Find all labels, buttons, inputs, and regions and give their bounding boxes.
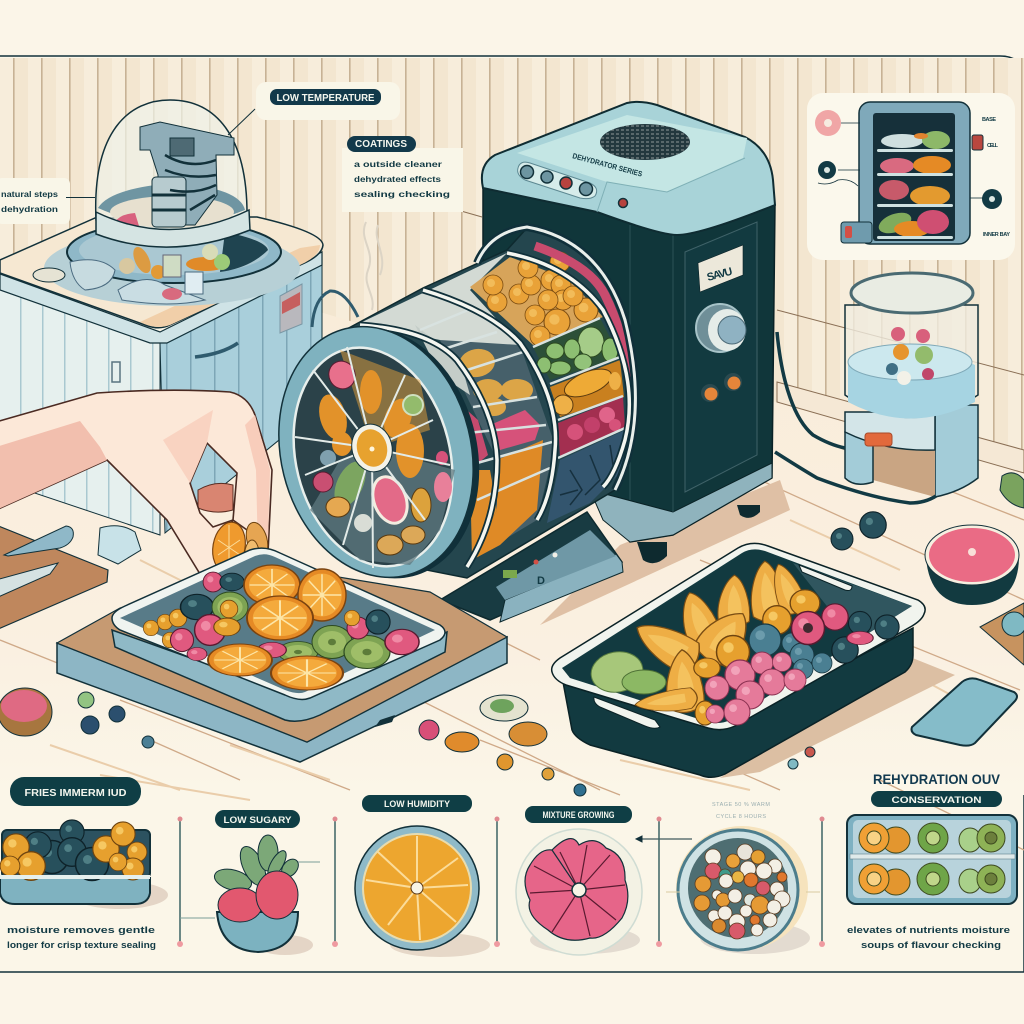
pan handles (799, 565, 852, 590)
rails (420, 308, 625, 500)
inset panel: stacked tray cross-section: CELL (987, 143, 999, 149)
door pull (112, 362, 120, 382)
callout: low temperature: LOW TEMPERATURE (276, 93, 375, 104)
counter left face (0, 280, 160, 535)
step 6 caption (847, 925, 1010, 950)
compartment fruit (859, 823, 1005, 895)
small faint caption: CYCLE 8 HOURS (716, 814, 766, 820)
green section (533, 318, 620, 380)
rehydration pill (871, 791, 1002, 807)
main dehydrator machine (482, 102, 775, 563)
small faint caption: STAGE 50 % WARM (712, 802, 770, 808)
glass trinkets on counter (33, 260, 205, 304)
lid seam (597, 158, 745, 212)
step 1 heading pill (10, 777, 141, 806)
step 2 berry bowl icon (212, 835, 320, 955)
jar lid (851, 273, 973, 313)
grapefruit half (925, 525, 1019, 605)
divider post (179, 818, 181, 944)
counter wooden top (0, 217, 323, 328)
right leg (935, 405, 978, 497)
orange buttons (701, 384, 719, 402)
step 1 caption: moisture removes gentle (7, 925, 155, 935)
control knob (696, 304, 744, 352)
gap floor (873, 442, 935, 497)
cutting board with knife (0, 525, 141, 630)
callout: coatings: dehydrated effects (354, 174, 441, 184)
cabinet outline (859, 102, 970, 244)
counter trim band (0, 252, 322, 343)
drawer knob (841, 222, 872, 243)
main dehydrator machine: SAVU (706, 266, 734, 284)
small faint caption (712, 802, 770, 820)
red tag (972, 135, 983, 150)
small glass jar far left (0, 310, 22, 412)
food in basin (119, 244, 230, 279)
glass jar (845, 305, 978, 418)
tray rim (112, 548, 445, 699)
right face inset (685, 222, 757, 492)
step 3 heading pill (362, 795, 472, 812)
base red switch (865, 433, 892, 446)
wheel spokes (295, 347, 450, 568)
shadow under machine (540, 480, 790, 625)
step 6 caption: soups of flavour checking (861, 940, 1001, 950)
water jar appliance (845, 273, 978, 497)
mango section (550, 360, 624, 417)
raspberry section (558, 397, 625, 457)
phone on table (912, 678, 1017, 746)
power cord (775, 332, 936, 503)
appliance ring basin (44, 230, 300, 306)
step 1 caption: longer for crisp texture sealing (7, 940, 156, 950)
left fruit tray (112, 548, 447, 721)
callout: coatings: sealing checking (354, 189, 450, 199)
counter handle (195, 343, 238, 357)
pan fruit (588, 559, 899, 725)
pink object behind hand gap (198, 483, 233, 512)
callout: low temperature (228, 82, 400, 135)
wooden floor (0, 205, 1024, 850)
shelf 2 (877, 156, 953, 176)
callout: coatings: a outside cleaner (354, 159, 443, 169)
pan outer body (563, 628, 913, 777)
step 4 heading pill (525, 806, 632, 823)
drum base unit (440, 512, 623, 622)
lid buttons (520, 166, 628, 208)
shadow under pan (720, 655, 955, 778)
lid button strip (518, 162, 597, 199)
step 3 dried orange slice (355, 826, 490, 957)
pan rim (552, 543, 925, 730)
background wall with vertical slats (0, 58, 1024, 480)
dark blue berry section (547, 430, 625, 523)
pink strip behind rear ring (535, 246, 634, 420)
rehydration pill: CONSERVATION (892, 795, 982, 805)
divider post (334, 818, 336, 944)
left leg (845, 432, 873, 484)
collar (845, 412, 935, 450)
step 4 heading pill: MIXTURE GROWING (542, 810, 614, 820)
callout: coatings (342, 136, 463, 212)
rehydration heading: REHYDRATION OUV (873, 771, 1001, 787)
step 6 compartment tray (847, 815, 1017, 904)
wooden board and blue base under left tray (57, 565, 507, 762)
callout: left label: natural steps (1, 189, 58, 199)
drum base unit: D (537, 575, 545, 587)
drum shell (345, 228, 635, 578)
shelf 3 (877, 180, 953, 207)
fruit in jar (886, 327, 934, 385)
dark marker left (818, 161, 836, 179)
jar water (848, 350, 975, 418)
divider post (821, 818, 823, 944)
tray wall (112, 630, 447, 721)
held dried slices (209, 520, 271, 580)
step 1 tray of berries (0, 820, 168, 909)
corner line (630, 225, 673, 512)
step 3 heading pill: LOW HUMIDITY (384, 799, 450, 809)
step 1 caption (7, 925, 156, 950)
counter right face (160, 262, 322, 533)
palm shading (163, 410, 213, 483)
shelf 4 (876, 209, 953, 239)
section fill behind rails (440, 340, 555, 560)
dark marker right (982, 189, 1002, 209)
step 1 heading pill: FRIES IMMERM IUD (24, 787, 127, 799)
callout: coatings: COATINGS (355, 139, 407, 150)
tray fruit (143, 565, 419, 690)
inset panel: stacked tray cross-section: INNER BAY (983, 232, 1010, 238)
bowl pieces (694, 844, 790, 939)
right black baking pan (552, 543, 925, 777)
gauge label (280, 284, 302, 333)
dome appliance on wooden counter (0, 100, 323, 535)
dome inner bowl (98, 183, 245, 225)
glass top (360, 253, 520, 368)
glass dome (96, 100, 247, 235)
step 2 heading pill: LOW SUGARY (224, 815, 292, 825)
blue stone (98, 526, 141, 564)
finger shading (245, 415, 270, 555)
display tag (698, 245, 743, 292)
divider post (496, 818, 498, 944)
wheel panels (310, 448, 455, 565)
machine body (483, 185, 775, 542)
inset panel: stacked tray cross-section (807, 93, 1015, 260)
wheel hub slice (347, 420, 397, 476)
machine feet (637, 542, 667, 563)
callout: left label (0, 178, 95, 224)
drum rings (477, 227, 635, 490)
step 5 bowl of mixed pieces (666, 826, 820, 954)
rotating drum (253, 227, 635, 599)
lid label: DEHYDRATOR SERIES (571, 151, 643, 179)
front drum wheel (253, 306, 505, 599)
callout: left label: dehydration (1, 204, 58, 214)
dome collar (96, 210, 250, 247)
divider post (658, 818, 660, 944)
inset labels: BASE (982, 117, 996, 123)
arm shading (0, 421, 107, 510)
vent grille (600, 124, 690, 160)
strip behind front wheel (415, 325, 497, 560)
step 2 heading pill (215, 810, 300, 828)
motor core (140, 122, 234, 227)
peach edge of top (140, 245, 320, 327)
pan interior (562, 549, 912, 723)
drum power loop (312, 291, 358, 327)
bottom trim (590, 463, 772, 542)
step 6 caption: elevates of nutrients moisture (847, 925, 1010, 935)
machine lid (482, 102, 775, 235)
golden balls section (470, 252, 603, 346)
shelf 1 (877, 131, 953, 152)
knife two (0, 563, 58, 598)
connector arrow (636, 836, 692, 842)
lid top plate (517, 115, 747, 192)
steam wisps (364, 222, 382, 310)
step 4 pink flower slice on plate (516, 829, 642, 955)
pan back wall light (793, 563, 912, 632)
hand holding dried slices (0, 390, 272, 574)
wheel fruit (313, 357, 452, 555)
knife one (4, 526, 73, 556)
loose berries and board on table (0, 473, 1024, 796)
pink marker (815, 110, 841, 136)
mid fruit between rings (457, 346, 543, 560)
tray interior (120, 554, 435, 693)
